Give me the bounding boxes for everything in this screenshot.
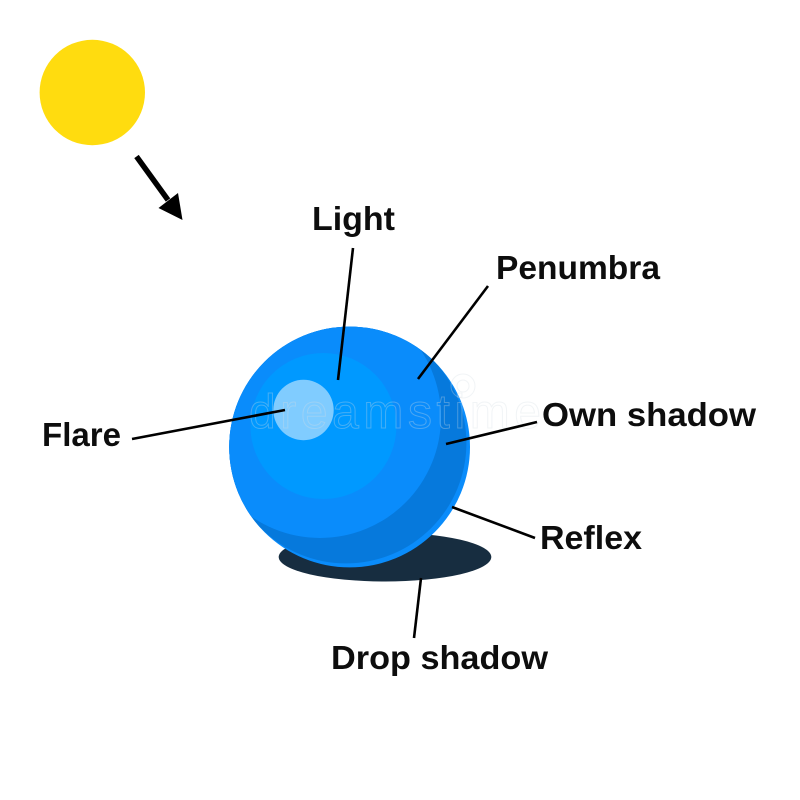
leader line: reflex (452, 507, 535, 538)
leader line: own shadow (446, 422, 537, 444)
own shadow (226, 323, 466, 563)
reflex: outer rim of the sphere (229, 327, 470, 567)
icon: sun (40, 40, 145, 145)
arrow: light direction (136, 156, 182, 220)
label: Flare: Flare (42, 416, 121, 453)
leader line: penumbra (418, 286, 488, 379)
label: Reflex: Reflex (540, 519, 643, 556)
sphere (229, 326, 470, 568)
label: Drop shadow: Drop shadow (331, 639, 548, 676)
label: Light: Light (312, 200, 395, 237)
watermark: dreamstime (249, 386, 541, 439)
leader line: light (338, 248, 353, 380)
label: Own shadow: Own shadow (542, 396, 756, 433)
label: Penumbra: Penumbra (496, 249, 661, 286)
leader line: drop shadow (414, 578, 421, 638)
flare (273, 380, 334, 440)
light area (250, 353, 396, 499)
penumbra (229, 326, 441, 538)
drop shadow ellipse (279, 532, 491, 582)
leader line: flare (132, 410, 285, 439)
